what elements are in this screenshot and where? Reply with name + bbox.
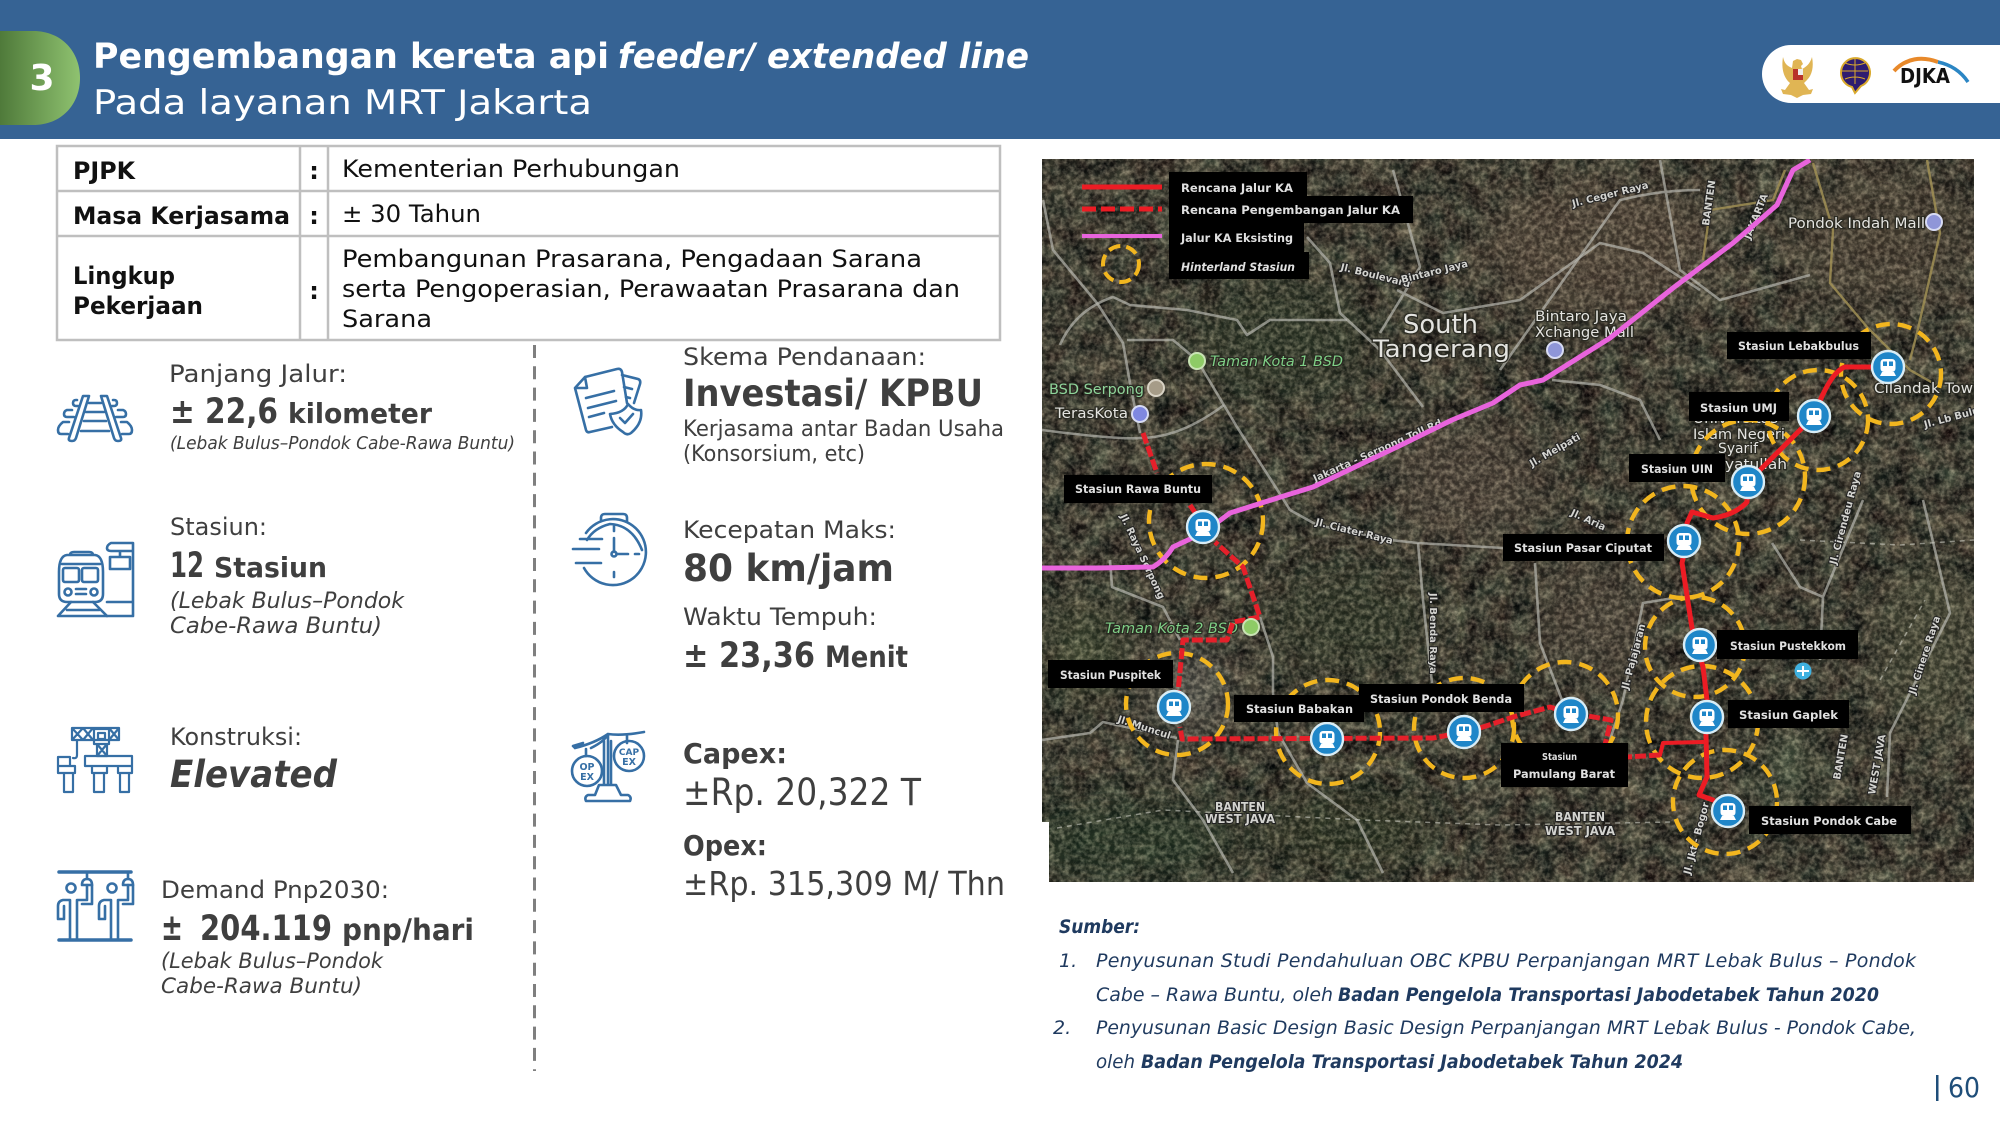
place names: BANTEN bbox=[1832, 734, 1851, 781]
map legend: Hinterland Stasiun bbox=[1181, 260, 1295, 274]
panel: stasiun: Stasiun: bbox=[170, 513, 267, 541]
place names: Jl. Boulevard bbox=[1338, 262, 1411, 290]
panel: panjang jalur: kilometer bbox=[288, 397, 432, 430]
map legend: Jalur KA Eksisting bbox=[1180, 231, 1293, 245]
row: masa kerjasama: Masa Kerjasama bbox=[73, 202, 290, 230]
station labels: Stasiun Pondok Cabe bbox=[1761, 814, 1897, 828]
sources block: Penyusunan Studi Pendahuluan OBC KPBU Perpanjangan MRT Lebak Bulus – Pondok bbox=[1096, 950, 1917, 972]
existing line bbox=[1042, 160, 1810, 568]
place names: Pondok Indah Mall bbox=[1788, 216, 1925, 232]
logo: DJKA bbox=[1894, 59, 1968, 88]
place names: Jl. Aria bbox=[1568, 507, 1607, 533]
sources block: Badan Pengelola Transportasi Jabodetabek Tahun 2020 bbox=[1338, 984, 1879, 1006]
station markers bbox=[1158, 351, 1904, 827]
place names: Bintaro Jaya bbox=[1400, 259, 1469, 286]
panel: stasiun: (Lebak Bulus–Pondok bbox=[170, 589, 405, 614]
row: lingkup pekerjaan: Pembangunan Prasarana, Pengadaan Sarana bbox=[342, 245, 922, 273]
station labels: Stasiun Babakan bbox=[1246, 702, 1353, 716]
station labels: Stasiun Puspitek bbox=[1060, 668, 1161, 682]
place names: Jl. Jkt - Bogor bbox=[1682, 801, 1712, 877]
row: lingkup pekerjaan: : bbox=[309, 277, 319, 305]
panel: konstruksi: Elevated bbox=[170, 753, 337, 796]
info table bbox=[57, 146, 1000, 340]
place names: Universitas bbox=[1693, 411, 1778, 427]
logo pill bbox=[1762, 45, 2000, 103]
panel: stasiun: Stasiun bbox=[214, 551, 327, 584]
icon: train at station bbox=[58, 543, 133, 616]
station labels: Stasiun Pustekkom bbox=[1730, 639, 1846, 653]
icon: balance scale: OP bbox=[579, 762, 595, 773]
sources block bbox=[1053, 916, 1917, 1073]
panel: kecepatan dan waktu tempuh: ± 23,36 bbox=[683, 636, 815, 676]
panel: panjang jalur bbox=[58, 360, 515, 454]
place names: Jl. Melpati bbox=[1527, 432, 1583, 470]
section number badge bbox=[0, 31, 80, 125]
row: lingkup pekerjaan: serta Pengoperasian, Perawaatan Prasarana dan bbox=[342, 275, 960, 303]
icon: balance scale: CAP bbox=[619, 748, 639, 758]
planned route bbox=[1143, 367, 1888, 800]
panel: skema pendanaan: (Konsorsium, etc) bbox=[683, 442, 865, 467]
panel: demand penumpang: Demand Pnp2030: bbox=[161, 876, 389, 904]
panel: capex opex: ±Rp. 315,309 M/ Thn bbox=[683, 864, 1005, 903]
panel: kecepatan dan waktu tempuh: Menit bbox=[825, 640, 908, 674]
place names: BANTEN bbox=[1555, 810, 1605, 824]
place names: TerasKota bbox=[1054, 406, 1128, 422]
roads bbox=[1042, 160, 1974, 873]
row: lingkup pekerjaan: Sarana bbox=[342, 305, 432, 333]
panel: capex opex: Capex: bbox=[683, 737, 787, 770]
station labels: Stasiun Pondok Benda bbox=[1370, 692, 1512, 706]
station labels: Stasiun Pasar Ciputat bbox=[1514, 541, 1652, 555]
place names: Syarif bbox=[1718, 441, 1759, 457]
row: masa kerjasama: ± 30 Tahun bbox=[342, 200, 481, 228]
panel: capex opex: Opex: bbox=[683, 829, 767, 862]
icon: railway track bbox=[58, 396, 132, 441]
place names: Xchange Mall bbox=[1535, 325, 1634, 341]
sources block: Cabe – Rawa Buntu, oleh bbox=[1096, 984, 1333, 1006]
hinterland circles bbox=[1126, 324, 1941, 854]
row: lingkup pekerjaan: Lingkup bbox=[73, 262, 175, 290]
place names: Jl. Lb Bulus bbox=[1922, 404, 1986, 431]
row: lingkup pekerjaan: Pekerjaan bbox=[73, 292, 203, 320]
page number bbox=[1936, 1071, 1980, 1104]
panel: capex opex bbox=[572, 732, 1005, 903]
place names: Jl. Muncul bbox=[1115, 714, 1172, 742]
panel: skema pendanaan: Investasi/ KPBU bbox=[683, 372, 983, 415]
place names: Jl. Ceger Raya bbox=[1570, 180, 1650, 210]
icon: document shield bbox=[575, 369, 641, 434]
icon: balance scale bbox=[572, 732, 644, 801]
sources block: Badan Pengelola Transportasi Jabodetabek Tahun 2024 bbox=[1141, 1051, 1683, 1073]
icon: balance scale: EX bbox=[580, 772, 595, 783]
title bbox=[93, 37, 1029, 123]
title: feeder/ extended line bbox=[618, 37, 1029, 77]
title: Pada layanan MRT Jakarta bbox=[93, 83, 592, 123]
station labels: Stasiun bbox=[1542, 752, 1577, 763]
section number badge: 3 bbox=[29, 58, 55, 99]
map: satellite route map bbox=[1010, 159, 1986, 882]
panel: panjang jalur: ± 22,6 bbox=[170, 392, 278, 432]
panel: kecepatan dan waktu tempuh: Waktu Tempuh: bbox=[683, 603, 877, 631]
panel: demand penumpang: 204.119 bbox=[200, 909, 332, 949]
place names: Jl. Ciater Raya bbox=[1313, 517, 1394, 547]
panel: demand penumpang: ± bbox=[161, 906, 183, 949]
place names: Islam Negeri bbox=[1693, 427, 1785, 443]
place names: Jakarta - Serpong Toll Rd bbox=[1311, 418, 1444, 485]
sources block: 1. bbox=[1059, 950, 1077, 972]
sources block: Sumber: bbox=[1059, 916, 1140, 938]
panel: panjang jalur: Panjang Jalur: bbox=[169, 360, 347, 388]
panel: kecepatan dan waktu tempuh: Kecepatan Maks: bbox=[683, 516, 896, 544]
map legend bbox=[1082, 172, 1413, 282]
panel: demand penumpang: (Lebak Bulus–Pondok bbox=[161, 949, 384, 973]
station labels: Stasiun UMJ bbox=[1700, 401, 1777, 415]
panel: stasiun: 12 bbox=[170, 546, 204, 586]
sources block: Penyusunan Basic Design Basic Design Perpanjangan MRT Lebak Bulus - Pondok Cabe, bbox=[1096, 1017, 1916, 1039]
place names: WEST JAVA bbox=[1545, 824, 1616, 838]
row: masa kerjasama: : bbox=[309, 202, 319, 230]
panel: panjang jalur: (Lebak Bulus–Pondok Cabe-Rawa Buntu) bbox=[170, 433, 515, 454]
row: masa kerjasama bbox=[73, 200, 481, 230]
station labels: Stasiun Rawa Buntu bbox=[1075, 482, 1201, 496]
panel: capex opex: ±Rp. 20,322 T bbox=[683, 771, 921, 814]
icon: standing passengers bbox=[58, 872, 133, 940]
panel: demand penumpang: Cabe-Rawa Buntu) bbox=[161, 974, 362, 998]
station labels: Stasiun Gaplek bbox=[1739, 708, 1838, 722]
place names: Jl. Benda Raya bbox=[1427, 592, 1438, 674]
place names: Jl. Pajajaran bbox=[1620, 623, 1648, 692]
header band bbox=[0, 0, 2000, 139]
panel: stasiun: Cabe-Rawa Buntu) bbox=[170, 614, 382, 639]
place names: BSD Serpong bbox=[1049, 382, 1144, 398]
row: PJPK: : bbox=[309, 157, 319, 185]
station labels: Stasiun UIN bbox=[1641, 462, 1713, 476]
place names: Taman Kota 2 BSD bbox=[1105, 621, 1238, 637]
icon: elevated viaduct crane bbox=[58, 728, 132, 792]
place names: WEST JAVA bbox=[1867, 733, 1889, 796]
row: PJPK: Kementerian Perhubungan bbox=[342, 155, 680, 183]
panel: konstruksi bbox=[58, 723, 337, 796]
place names: Cilandak Tow bbox=[1874, 381, 1973, 397]
station labels: Stasiun Lebakbulus bbox=[1738, 339, 1859, 353]
place names: Jl. Cirendeu Raya bbox=[1828, 470, 1864, 567]
page number: 60 bbox=[1948, 1071, 1980, 1104]
panel: kecepatan dan waktu tempuh bbox=[573, 514, 908, 676]
place names: JAKARTA bbox=[1742, 192, 1771, 242]
airport marker bbox=[1794, 662, 1812, 680]
place names: Jl. Cinere Raya bbox=[1907, 615, 1943, 697]
logo: garuda bbox=[1781, 57, 1813, 98]
place names bbox=[1049, 180, 1986, 877]
map legend: Rencana Jalur KA bbox=[1181, 181, 1293, 195]
panel: skema pendanaan: Skema Pendanaan: bbox=[683, 343, 926, 371]
place names: Bintaro Jaya bbox=[1535, 309, 1627, 325]
icon: stopwatch bbox=[573, 514, 646, 585]
row: PJPK bbox=[73, 155, 680, 185]
panel: stasiun bbox=[58, 513, 405, 639]
panel: skema pendanaan bbox=[575, 343, 1004, 467]
place names: WEST JAVA bbox=[1205, 812, 1276, 826]
place names: BANTEN bbox=[1701, 180, 1718, 226]
mall markers bbox=[1132, 214, 1942, 635]
sources block: oleh bbox=[1096, 1051, 1135, 1073]
station labels: Pamulang Barat bbox=[1513, 767, 1615, 781]
icon: balance scale: EX bbox=[622, 757, 637, 768]
place names: yatullah bbox=[1725, 457, 1787, 473]
panel: demand penumpang bbox=[58, 872, 474, 998]
station labels bbox=[1048, 332, 1911, 834]
panel: demand penumpang: pnp/hari bbox=[342, 913, 474, 947]
panel: konstruksi: Konstruksi: bbox=[170, 723, 302, 751]
sources block: 2. bbox=[1053, 1017, 1071, 1039]
place names: Tangerang bbox=[1372, 335, 1510, 363]
logo: kemenhub bbox=[1841, 58, 1870, 93]
panel: kecepatan dan waktu tempuh: 80 km/jam bbox=[683, 547, 894, 590]
place names: Jl. Raya Serpong bbox=[1117, 512, 1166, 601]
panel: skema pendanaan: Kerjasama antar Badan Usaha bbox=[683, 417, 1004, 442]
map legend: Rencana Pengembangan Jalur KA bbox=[1181, 203, 1400, 217]
row: PJPK: PJPK bbox=[73, 157, 136, 185]
place names: Taman Kota 1 BSD bbox=[1210, 354, 1343, 370]
title: Pengembangan kereta api bbox=[93, 37, 609, 77]
place names: BANTEN bbox=[1215, 800, 1265, 814]
logo: DJKA: DJKA bbox=[1900, 64, 1950, 88]
place names: South bbox=[1403, 310, 1478, 340]
row: lingkup pekerjaan bbox=[73, 245, 960, 333]
